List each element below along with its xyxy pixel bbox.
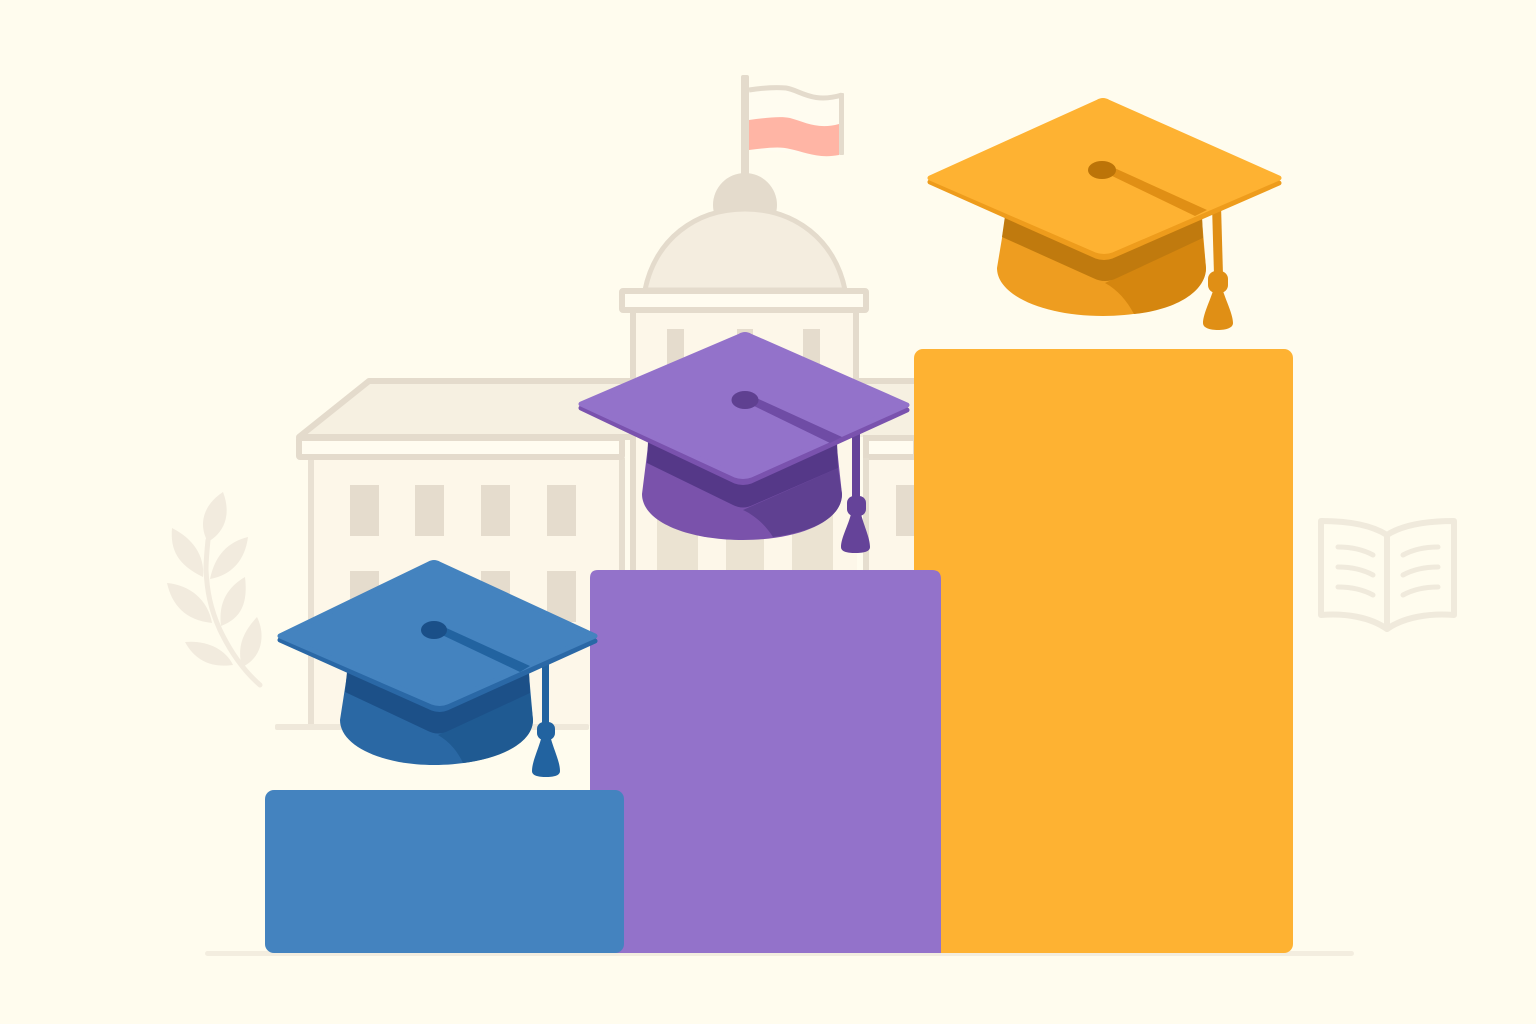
left wing: [275, 381, 632, 730]
cap: blue: [280, 562, 595, 777]
bar: blue: [265, 790, 624, 953]
bar: purple: [590, 570, 941, 953]
ground line: [205, 951, 1354, 956]
flag: [741, 75, 844, 180]
bar: gold: [914, 349, 1293, 953]
icon: laurel branch: [167, 492, 262, 685]
background building: [275, 75, 916, 730]
right wing: [856, 378, 916, 570]
central block: [630, 310, 859, 570]
icon: open book: [1321, 521, 1454, 629]
cap: gold: [930, 100, 1279, 330]
dome: [622, 173, 866, 310]
cap: purple: [581, 334, 907, 553]
